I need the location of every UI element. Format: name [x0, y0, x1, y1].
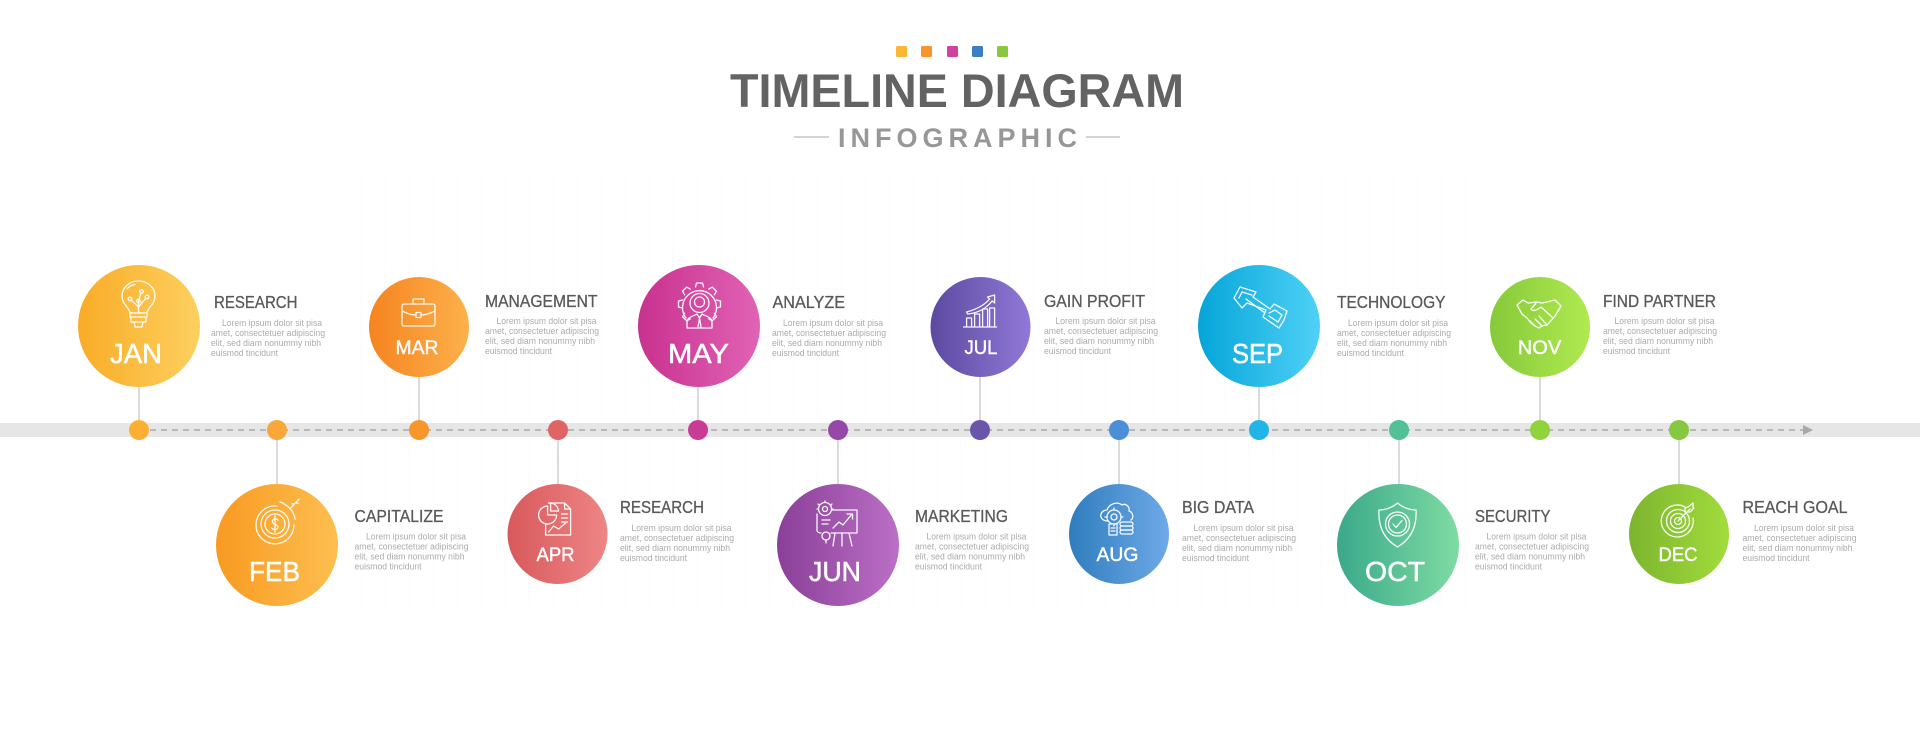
text: JUN marketing: elit, sed diam nonummy nibh — [915, 552, 1025, 562]
text: SEP technology — [1337, 292, 1451, 359]
text: DEC reach goal: Lorem ipsum dolor sit pisa — [1754, 523, 1855, 534]
text: MAR management: euismod tincidunt — [485, 346, 552, 357]
text: JUN marketing: Lorem ipsum dolor sit pisa — [926, 532, 1027, 542]
milestone: AUG: AUG — [1096, 544, 1138, 566]
text: FEB capitalize: amet, consectetuer adipiscing — [354, 542, 468, 552]
timeline bar — [0, 423, 1920, 437]
text: JUL gain profit: GAIN PROFIT — [1044, 291, 1145, 311]
milestone: OCT: OCT — [1365, 556, 1425, 587]
icon: report document — [539, 503, 571, 535]
text: JAN research: euismod tincidunt — [211, 348, 278, 359]
text: DEC reach goal: euismod tincidunt — [1742, 553, 1810, 564]
text: MAY analyze: amet, consectetuer adipiscing — [772, 328, 886, 339]
text: DEC reach goal — [1742, 497, 1856, 564]
text: DEC reach goal: amet, consectetuer adipiscing — [1742, 533, 1856, 544]
text: APR research: RESEARCH — [620, 497, 704, 517]
icon: handshake — [1517, 300, 1561, 328]
text: MAR management: elit, sed diam nonummy nibh — [485, 336, 595, 347]
text: FEB capitalize: Lorem ipsum dolor sit pisa — [366, 532, 467, 542]
milestone: OCT — [1337, 420, 1459, 606]
text: MAR management: amet, consectetuer adipiscing — [485, 326, 599, 337]
milestone: JUN: JUN — [809, 556, 861, 587]
text: JUL gain profit: elit, sed diam nonummy nibh — [1044, 336, 1154, 347]
text: JAN research: amet, consectetuer adipiscing — [211, 328, 325, 339]
text: FEB capitalize: elit, sed diam nonummy nibh — [354, 552, 464, 562]
milestone: MAR — [369, 277, 469, 440]
icon: briefcase — [402, 299, 435, 326]
text: SEP technology: euismod tincidunt — [1337, 348, 1404, 359]
text: NOV find partner — [1603, 291, 1717, 357]
text: JUL gain profit: Lorem ipsum dolor sit pisa — [1056, 316, 1156, 327]
text: NOV find partner: euismod tincidunt — [1603, 346, 1670, 357]
milestone: JUL: JUL — [964, 337, 998, 359]
milestone: JUL — [930, 277, 1030, 440]
text: OCT security: Lorem ipsum dolor sit pisa — [1486, 532, 1587, 542]
icon: dollar target — [256, 499, 299, 544]
icon: gear and person — [678, 283, 720, 328]
text: AUG big data: amet, consectetuer adipiscing — [1182, 533, 1296, 544]
text: AUG big data — [1182, 497, 1296, 564]
text: JAN research — [211, 292, 325, 359]
text: MAY analyze: ANALYZE — [772, 292, 845, 312]
text: APR research: euismod tincidunt — [620, 553, 687, 564]
icon: growth chart — [964, 295, 997, 327]
text: SEP technology: amet, consectetuer adipiscing — [1337, 328, 1451, 339]
icon: smart glasses — [1234, 287, 1287, 328]
text: JUN marketing — [915, 506, 1029, 572]
milestone: MAY: MAY — [668, 338, 729, 369]
header: colour squares — [896, 46, 1008, 57]
text: MAY analyze: Lorem ipsum dolor sit pisa — [783, 318, 884, 329]
icon: cloud and database — [1101, 503, 1133, 535]
text: APR research: elit, sed diam nonummy nibh — [620, 543, 730, 554]
text: MAY analyze: elit, sed diam nonummy nibh — [772, 338, 882, 349]
text: FEB capitalize: CAPITALIZE — [354, 506, 444, 526]
text: SEP technology: elit, sed diam nonummy nibh — [1337, 338, 1447, 349]
milestone: NOV — [1490, 277, 1590, 440]
text: AUG big data: BIG DATA — [1182, 497, 1254, 517]
milestone: APR — [508, 420, 608, 584]
milestone: FEB: FEB — [249, 556, 300, 587]
text: OCT security: elit, sed diam nonummy nibh — [1475, 552, 1585, 562]
text: AUG big data: Lorem ipsum dolor sit pisa — [1194, 523, 1294, 534]
text: NOV find partner: Lorem ipsum dolor sit pisa — [1614, 316, 1715, 327]
text: DEC reach goal: REACH GOAL — [1742, 497, 1848, 517]
milestone: NOV: NOV — [1518, 337, 1561, 359]
text: JAN research: Lorem ipsum dolor sit pisa — [222, 318, 323, 329]
text: NOV find partner: amet, consectetuer adipiscing — [1603, 326, 1717, 337]
milestone: DEC — [1629, 420, 1729, 584]
text: AUG big data: elit, sed diam nonummy nibh — [1182, 543, 1292, 554]
icon: target and arrow — [1661, 503, 1694, 537]
text: AUG big data: euismod tincidunt — [1182, 553, 1249, 564]
milestone: JUN — [777, 420, 899, 606]
text: APR research: amet, consectetuer adipiscing — [620, 533, 734, 544]
icon: light bulb — [122, 281, 155, 327]
text: NOV find partner: elit, sed diam nonummy nibh — [1603, 336, 1713, 347]
text: MAY analyze — [772, 292, 886, 359]
text: MAR management — [485, 291, 599, 357]
milestone: FEB — [216, 420, 338, 606]
text: FEB capitalize — [354, 506, 468, 572]
milestone: JAN: JAN — [110, 338, 162, 369]
text: JUL gain profit: amet, consectetuer adipiscing — [1044, 326, 1158, 337]
text: MAR management: MANAGEMENT — [485, 291, 598, 311]
text: JAN research: elit, sed diam nonummy nibh — [211, 338, 321, 349]
text: OCT security: SECURITY — [1475, 506, 1551, 526]
text: OCT security: amet, consectetuer adipiscing — [1475, 542, 1589, 552]
arrow: timeline end — [1803, 425, 1813, 435]
text: SEP technology: Lorem ipsum dolor sit pisa — [1348, 318, 1449, 329]
icon: security shield — [1379, 503, 1416, 547]
text: JUN marketing: MARKETING — [915, 506, 1008, 526]
text: JUN marketing: euismod tincidunt — [915, 562, 982, 572]
text: MAY analyze: euismod tincidunt — [772, 348, 839, 359]
text: OCT security — [1475, 506, 1589, 572]
milestone: AUG — [1069, 420, 1169, 584]
text: DEC reach goal: elit, sed diam nonummy nibh — [1742, 543, 1852, 554]
milestone: JAN — [78, 265, 200, 440]
text: APR research: Lorem ipsum dolor sit pisa — [632, 523, 732, 534]
text: MAR management: Lorem ipsum dolor sit pisa — [496, 316, 597, 327]
milestone: MAR: MAR — [396, 337, 438, 359]
milestone: SEP: SEP — [1232, 338, 1283, 369]
text: JAN research: RESEARCH — [214, 292, 298, 312]
text: APR research — [620, 497, 734, 564]
text: OCT security: euismod tincidunt — [1475, 562, 1542, 572]
text: NOV find partner: FIND PARTNER — [1603, 291, 1716, 311]
milestone: SEP — [1198, 265, 1320, 440]
title: TIMELINE DIAGRAM — [730, 64, 1184, 117]
milestone: DEC: DEC — [1658, 544, 1698, 566]
text: JUL gain profit: euismod tincidunt — [1044, 346, 1111, 357]
text: JUN marketing: amet, consectetuer adipiscing — [915, 542, 1029, 552]
icon: presentation board — [817, 501, 857, 546]
text: SEP technology: TECHNOLOGY — [1337, 292, 1446, 312]
subtitle: INFOGRAPHIC — [838, 123, 1077, 153]
text: JUL gain profit — [1044, 291, 1158, 357]
milestone: MAY — [638, 265, 760, 440]
text: FEB capitalize: euismod tincidunt — [354, 562, 422, 572]
milestone: APR: APR — [536, 544, 574, 566]
